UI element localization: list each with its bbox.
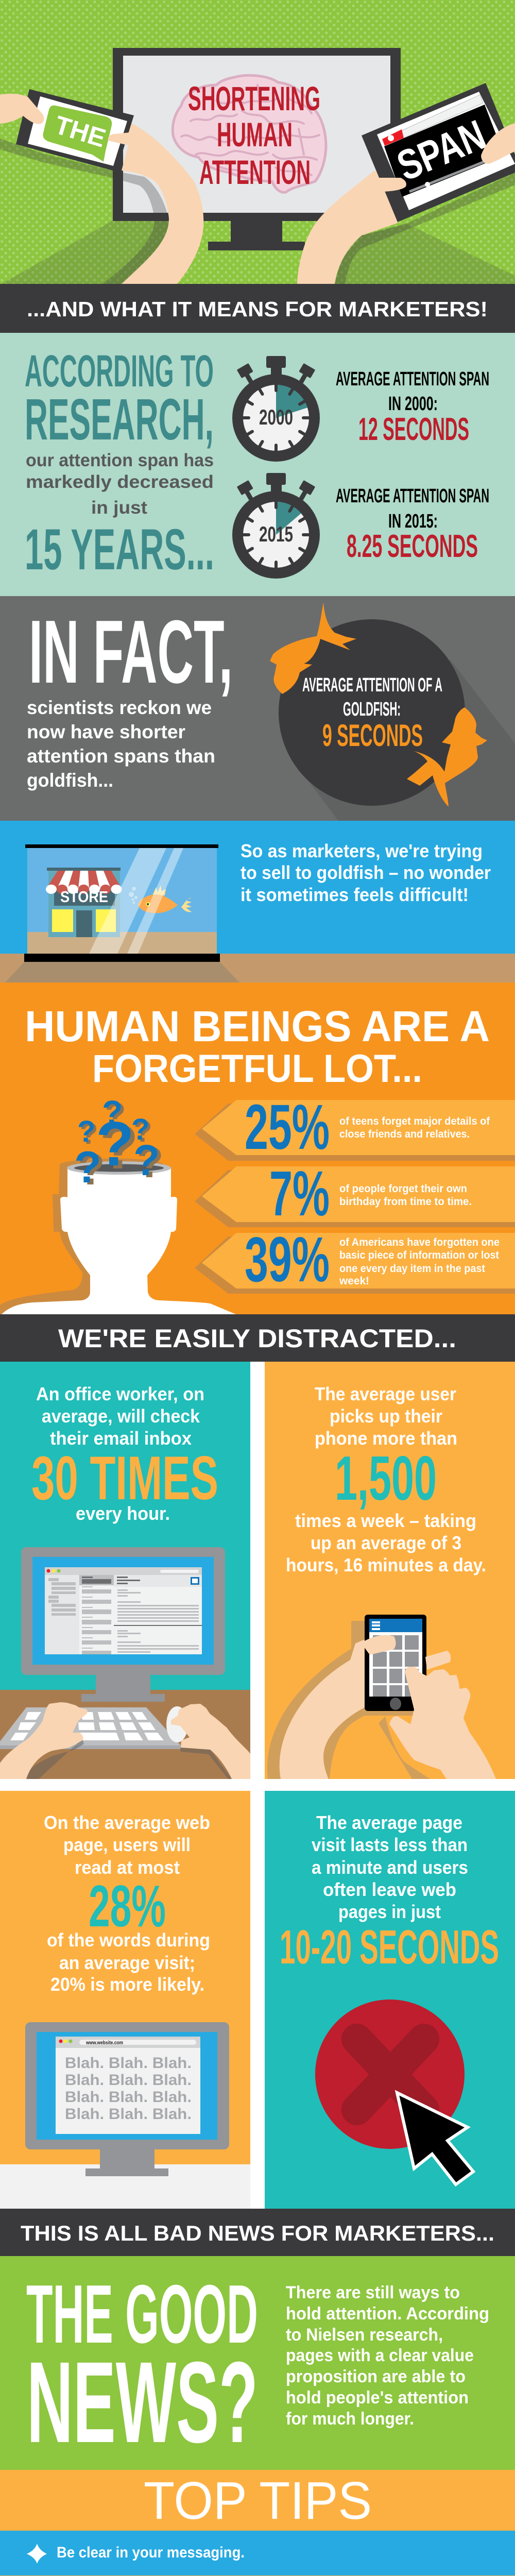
stat: attention span 2000: IN 2000: — [388, 393, 438, 415]
text: office worker — [36, 1383, 204, 1524]
panel: page visit — [265, 1791, 515, 2209]
icon: stopwatch 2000: 2000 — [259, 405, 293, 429]
icon: head with question marks — [0, 1093, 236, 1314]
text: ways to hold attention: for much longer. — [286, 2409, 414, 2429]
icon: mouse — [166, 1706, 188, 1742]
hero panel — [0, 0, 515, 284]
icon: stopwatch 2015: 2015 — [259, 522, 293, 546]
heading: top tips: TOP TIPS — [144, 2471, 372, 2530]
title: shortening human attention — [188, 79, 320, 191]
text: attention span decreased — [26, 450, 214, 518]
arrow: 25 percent: close friends and relatives. — [339, 1128, 470, 1140]
icon: desktop monitor with email client — [21, 1547, 225, 1702]
heading bar: bad news — [0, 2209, 515, 2256]
stat: goldfish 9 seconds — [302, 674, 442, 753]
icon: monitor with blah text: www.website.com — [85, 2040, 123, 2046]
text: office worker: An office worker, on — [36, 1383, 204, 1404]
icon: head with question marks: ? — [102, 1093, 123, 1131]
text: average web page: page, users will — [63, 1834, 191, 1855]
icon: head with question marks: ? — [131, 1113, 149, 1146]
panel: goldfish — [0, 596, 515, 821]
text: attention span decreased: in just — [91, 498, 147, 518]
heading: in fact: IN FACT, — [29, 601, 233, 702]
stat: goldfish 9 seconds: 9 SECONDS — [322, 718, 423, 753]
arrow: 25 percent: of teens forget major details of — [339, 1115, 490, 1127]
icon: smartphone — [365, 1615, 426, 1711]
text: ways to hold attention — [286, 2283, 489, 2429]
icon: monitor with blah text — [25, 2022, 229, 2176]
arrow: 39 percent — [195, 1225, 515, 1295]
heading bar: easily distracted: WE'RE EASILY DISTRACTED... — [58, 1324, 456, 1353]
right arm — [297, 171, 407, 284]
icon: monitor with blah text: Blah. Blah. Blah. — [65, 2106, 192, 2123]
stat: attention span 2015: IN 2015: — [388, 511, 438, 532]
stat: 28 percent: 28% — [89, 1874, 166, 1939]
stat: goldfish 9 seconds: GOLDFISH: — [343, 699, 401, 720]
icon: head with question marks: ? — [77, 1115, 95, 1148]
icon: keyboard — [0, 1707, 181, 1749]
text: average user — [286, 1383, 486, 1575]
text: scientists reckon — [27, 697, 215, 791]
panel: email inbox — [0, 1362, 250, 1779]
icon: monitor with blah text: Blah. Blah. Blah. — [65, 2089, 192, 2106]
text: selling to goldfish: to sell to goldfish – no wonder — [241, 862, 491, 883]
tip 1: Be clear in your messaging. — [57, 2544, 245, 2561]
tip 1 — [0, 2531, 515, 2575]
icon: head with question marks: ? — [133, 1136, 160, 1184]
icon: brain — [173, 75, 326, 192]
text: ways to hold attention: hold attention. According — [286, 2304, 489, 2324]
right tablet with SPAN — [362, 83, 515, 222]
text: average user: picks up their — [330, 1405, 442, 1427]
dark circle — [279, 619, 465, 806]
arrow: 25 percent: 25% — [245, 1092, 330, 1163]
stat: attention span 2000 — [336, 368, 489, 447]
text: average page visit: often leave web — [323, 1879, 456, 1900]
text: ways to hold attention: to Nielsen research, — [286, 2325, 443, 2345]
stat: attention span 2015 — [336, 485, 489, 564]
arrow: 25 percent — [195, 1092, 515, 1163]
right hand pointing — [389, 1667, 496, 1779]
left tablet with THE — [16, 89, 134, 172]
thumb over phone — [361, 1635, 396, 1655]
right hand fingers — [373, 123, 515, 192]
hand shadows — [26, 1739, 232, 1779]
store — [46, 868, 122, 937]
heading: human beings forgetful lot: HUMAN BEINGS ARE A — [25, 1002, 490, 1050]
text: selling to goldfish: it sometimes feels difficult! — [241, 884, 469, 905]
question marks: ? — [78, 1145, 105, 1194]
left arm shadow — [0, 139, 169, 284]
store: STORE — [60, 888, 108, 906]
text: average page visit: The average page — [316, 1812, 462, 1833]
text: scientists reckon: attention spans than — [27, 745, 215, 767]
text: office worker: their email inbox — [50, 1428, 192, 1449]
text: average user: up an average of 3 — [311, 1532, 461, 1553]
heading: the good news — [26, 2268, 258, 2467]
text: average user: phone more than — [315, 1428, 457, 1449]
left arm holding phone — [280, 1636, 394, 1779]
panel: top tips — [0, 2470, 515, 2576]
icon: monitor with blah text: Blah. Blah. Blah. — [65, 2072, 192, 2089]
question marks — [78, 1095, 163, 1194]
stat: 30 times: 30 TIMES — [31, 1444, 218, 1513]
text: selling to goldfish — [241, 840, 491, 905]
arrow: 39 percent: of Americans have forgotten one — [339, 1236, 500, 1248]
text: average page visit: visit lasts less than — [312, 1834, 468, 1855]
panel: selling to goldfish — [0, 821, 515, 982]
heading bar: and what it means — [0, 284, 515, 333]
desk — [0, 1690, 250, 1779]
question marks: ? — [80, 1117, 98, 1150]
heading: the good news: NEWS? — [27, 2338, 258, 2467]
question marks: ? — [134, 1115, 152, 1148]
left hand fingers — [0, 94, 154, 160]
heading bar: easily distracted — [0, 1314, 515, 1362]
panel: forgetful — [0, 982, 515, 1314]
icon: head with question marks: ? — [96, 1109, 134, 1179]
text: average page visit: pages in just — [338, 1901, 441, 1922]
right arm shadow — [335, 173, 515, 284]
text: average page visit: a minute and users — [312, 1857, 468, 1878]
arrow: 39 percent: one every day item in the past — [339, 1263, 485, 1275]
heading: human beings forgetful lot: FORGETFUL LOT... — [92, 1047, 422, 1091]
text: office worker: every hour. — [76, 1503, 170, 1524]
right mouse hand — [171, 1704, 250, 1779]
right tablet with SPAN: SPAN — [390, 111, 492, 190]
left typing hand — [0, 1702, 88, 1779]
arrow: 7 percent: 7% — [269, 1159, 330, 1229]
icon: cursor — [397, 2093, 473, 2184]
arrow: 7 percent: of people forget their own — [339, 1183, 467, 1195]
question marks: ? — [105, 1095, 126, 1133]
tip 2 — [0, 2575, 515, 2576]
panel: research — [0, 333, 515, 596]
heading: the good news: THE GOOD — [26, 2268, 258, 2361]
arrow: 39 percent: 39% — [245, 1225, 330, 1295]
text: average user: times a week – taking — [295, 1510, 476, 1531]
text: ways to hold attention: pages with a clear value — [286, 2346, 474, 2365]
text: average user: The average user — [315, 1383, 456, 1404]
heading: according to research: RESEARCH, — [25, 387, 214, 452]
text: attention span decreased: our attention span has — [26, 450, 214, 470]
left tablet with THE: THE — [52, 110, 109, 153]
text: scientists reckon: goldfish... — [27, 770, 113, 791]
icon: monitor with blah text: Blah. Blah. Blah. — [65, 2055, 192, 2072]
left arm — [108, 123, 203, 284]
icon: goldfish bottom — [407, 707, 487, 807]
arrow: 39 percent: basic piece of information or lost — [339, 1249, 499, 1261]
text: average web page — [44, 1812, 210, 1995]
text: attention span decreased: markedly decreased — [26, 472, 214, 492]
text: scientists reckon: scientists reckon we — [27, 697, 212, 718]
panel: good news — [0, 2256, 515, 2470]
speech bubble — [43, 106, 112, 162]
icon: close button — [315, 1999, 465, 2149]
icon: stopwatch 2000 — [232, 356, 320, 462]
icon: stopwatch 2015 — [232, 473, 320, 579]
shadow: person silhouettes — [2, 221, 515, 284]
text: scientists reckon: now have shorter — [27, 721, 185, 742]
text: office worker: average, will check — [42, 1405, 200, 1427]
text: average web page: of the words during — [47, 1929, 210, 1951]
hand shadow — [267, 1621, 433, 1779]
text: ways to hold attention: proposition are able to — [286, 2367, 466, 2386]
text: average web page: an average visit; — [59, 1952, 195, 1973]
text: average page visit — [312, 1812, 468, 1922]
question marks: ? — [100, 1112, 139, 1182]
text: average web page: read at most — [75, 1857, 180, 1878]
icon: goldfish top — [270, 602, 356, 694]
text: ways to hold attention: hold people's attention — [286, 2388, 469, 2408]
heading: human beings forgetful lot — [25, 1002, 490, 1091]
arrow: 39 percent: week! — [339, 1275, 369, 1287]
panel: words read — [0, 1791, 250, 2209]
text: average web page: 20% is more likely. — [50, 1974, 204, 1995]
icon: fish tank with store — [5, 844, 239, 982]
text: selling to goldfish: So as marketers, we're trying — [241, 840, 483, 861]
icon: head with question marks: ? — [74, 1143, 101, 1192]
panel: phone pickups — [265, 1362, 515, 1779]
heading bar: and what it means: ...AND WHAT IT MEANS FOR MARKETERS! — [27, 297, 488, 321]
title: shortening human attention: ATTENTION — [199, 153, 311, 191]
question marks: ? — [137, 1138, 163, 1187]
stat: 1,500: 1,500 — [335, 1443, 437, 1513]
text: average user: hours, 16 minutes a day. — [286, 1554, 486, 1575]
text: average web page: On the average web — [44, 1812, 210, 1833]
arrow: 7 percent: birthday from time to time. — [339, 1196, 472, 1208]
heading: 15 years: 15 YEARS... — [25, 517, 214, 582]
heading: according to research: ACCORDING TO — [25, 346, 214, 396]
heading: according to research — [25, 346, 214, 452]
heading bar: bad news: THIS IS ALL BAD NEWS FOR MARKETERS... — [21, 2221, 494, 2245]
computer monitor — [113, 48, 401, 250]
title: shortening human attention: HUMAN — [217, 115, 293, 154]
title: shortening human attention: SHORTENING — [188, 79, 320, 117]
icon: small goldfish — [129, 885, 192, 913]
arrow: 7 percent — [195, 1159, 515, 1229]
text: ways to hold attention: There are still ways to — [286, 2283, 460, 2302]
